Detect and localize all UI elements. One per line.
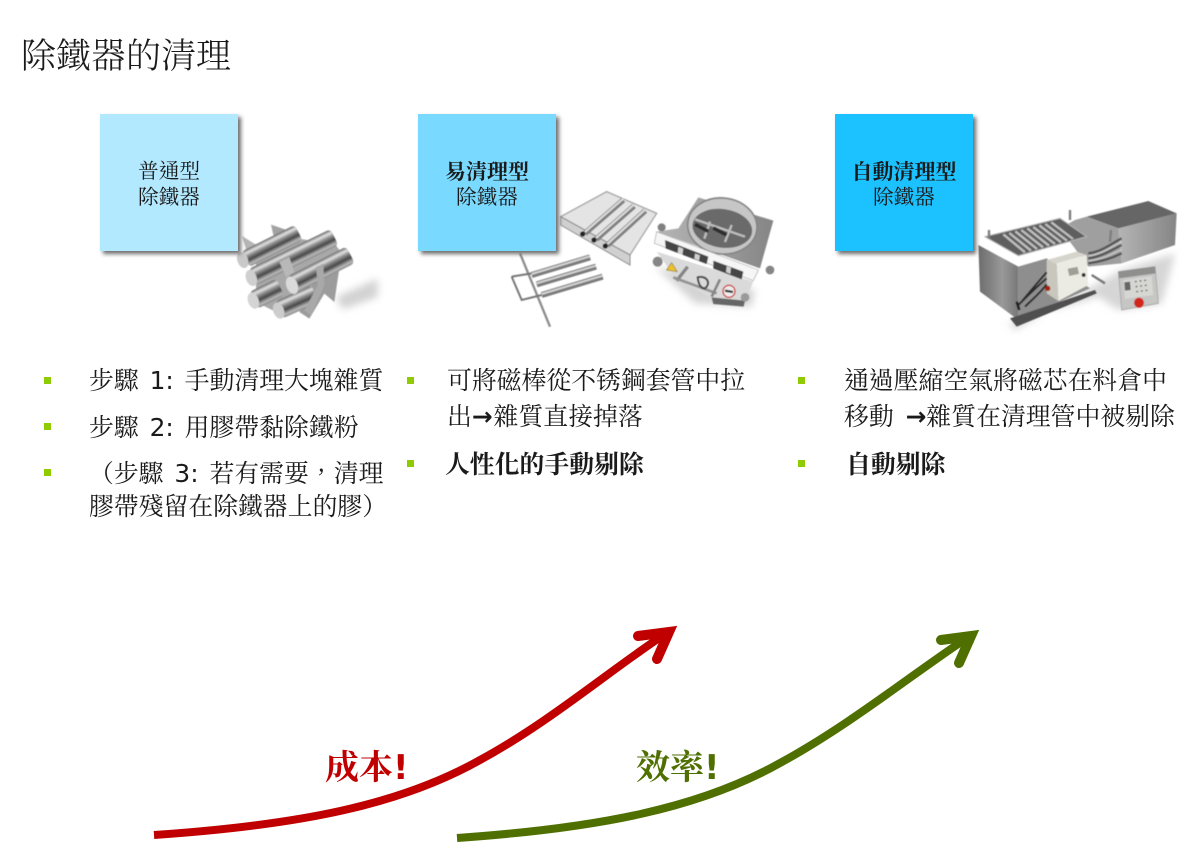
box: easy-clean type label: 易清理型 <box>445 156 529 186</box>
pull-out description: 可將磁棒從不锈鋼套管中拉 <box>447 366 745 395</box>
step 1 text: 步驟 1: 手動清理大塊雜質 <box>89 366 383 395</box>
image: removable magnet frame and rods <box>510 190 658 328</box>
image: standard magnetic separator rods <box>236 224 381 319</box>
arrow: efficiency rising <box>456 630 980 842</box>
box: automatic type label: 除鐵器 <box>873 185 935 209</box>
step 3 text <box>89 459 387 521</box>
result line: 出→雜質直接掉落 <box>447 402 643 431</box>
step 3 text: （步驟 3: 若有需要，清理 <box>89 459 383 488</box>
bullet marker 3 <box>44 469 51 476</box>
box: standard type label: 除鐵器 <box>138 185 200 209</box>
compressed air description: 通過壓縮空氣將磁芯在料倉中 <box>844 366 1167 395</box>
result line: 移動 →雜質在清理管中被剔除 <box>844 402 1175 431</box>
bullet marker 1 <box>798 377 805 384</box>
panel: automatic separator <box>798 114 1178 481</box>
bullet marker 2 <box>798 460 805 467</box>
box: easy-clean type label <box>418 114 556 251</box>
bold summary: 自動剔除 <box>846 445 945 481</box>
box: standard type label <box>100 114 238 251</box>
bullet marker 2 <box>407 460 414 467</box>
box: automatic type label: 自動清理型 <box>852 156 956 186</box>
title: 除鐵器的清理 <box>21 37 231 77</box>
image: automatic cleaning machine <box>978 200 1178 331</box>
panel: standard separator <box>44 114 387 521</box>
bullet marker 1 <box>407 377 414 384</box>
arrow: cost rising <box>154 626 678 839</box>
step 2 text: 步驟 2: 用膠帶黏除鐵粉 <box>89 413 359 442</box>
bullet marker 2 <box>44 423 51 430</box>
image: separator housing <box>652 196 775 310</box>
box: automatic type label <box>835 114 973 251</box>
label: efficiency: 效率! <box>636 748 720 788</box>
box: easy-clean type label: 除鐵器 <box>456 185 518 209</box>
panel: easy-clean separator <box>407 114 775 481</box>
bullet marker 1 <box>44 377 51 384</box>
box: standard type label: 普通型 <box>138 159 200 183</box>
label: cost: 成本! <box>325 748 409 788</box>
step 3 text: 膠帶殘留在除鐵器上的膠） <box>89 492 387 521</box>
bold summary: 人性化的手動剔除 <box>445 445 644 481</box>
